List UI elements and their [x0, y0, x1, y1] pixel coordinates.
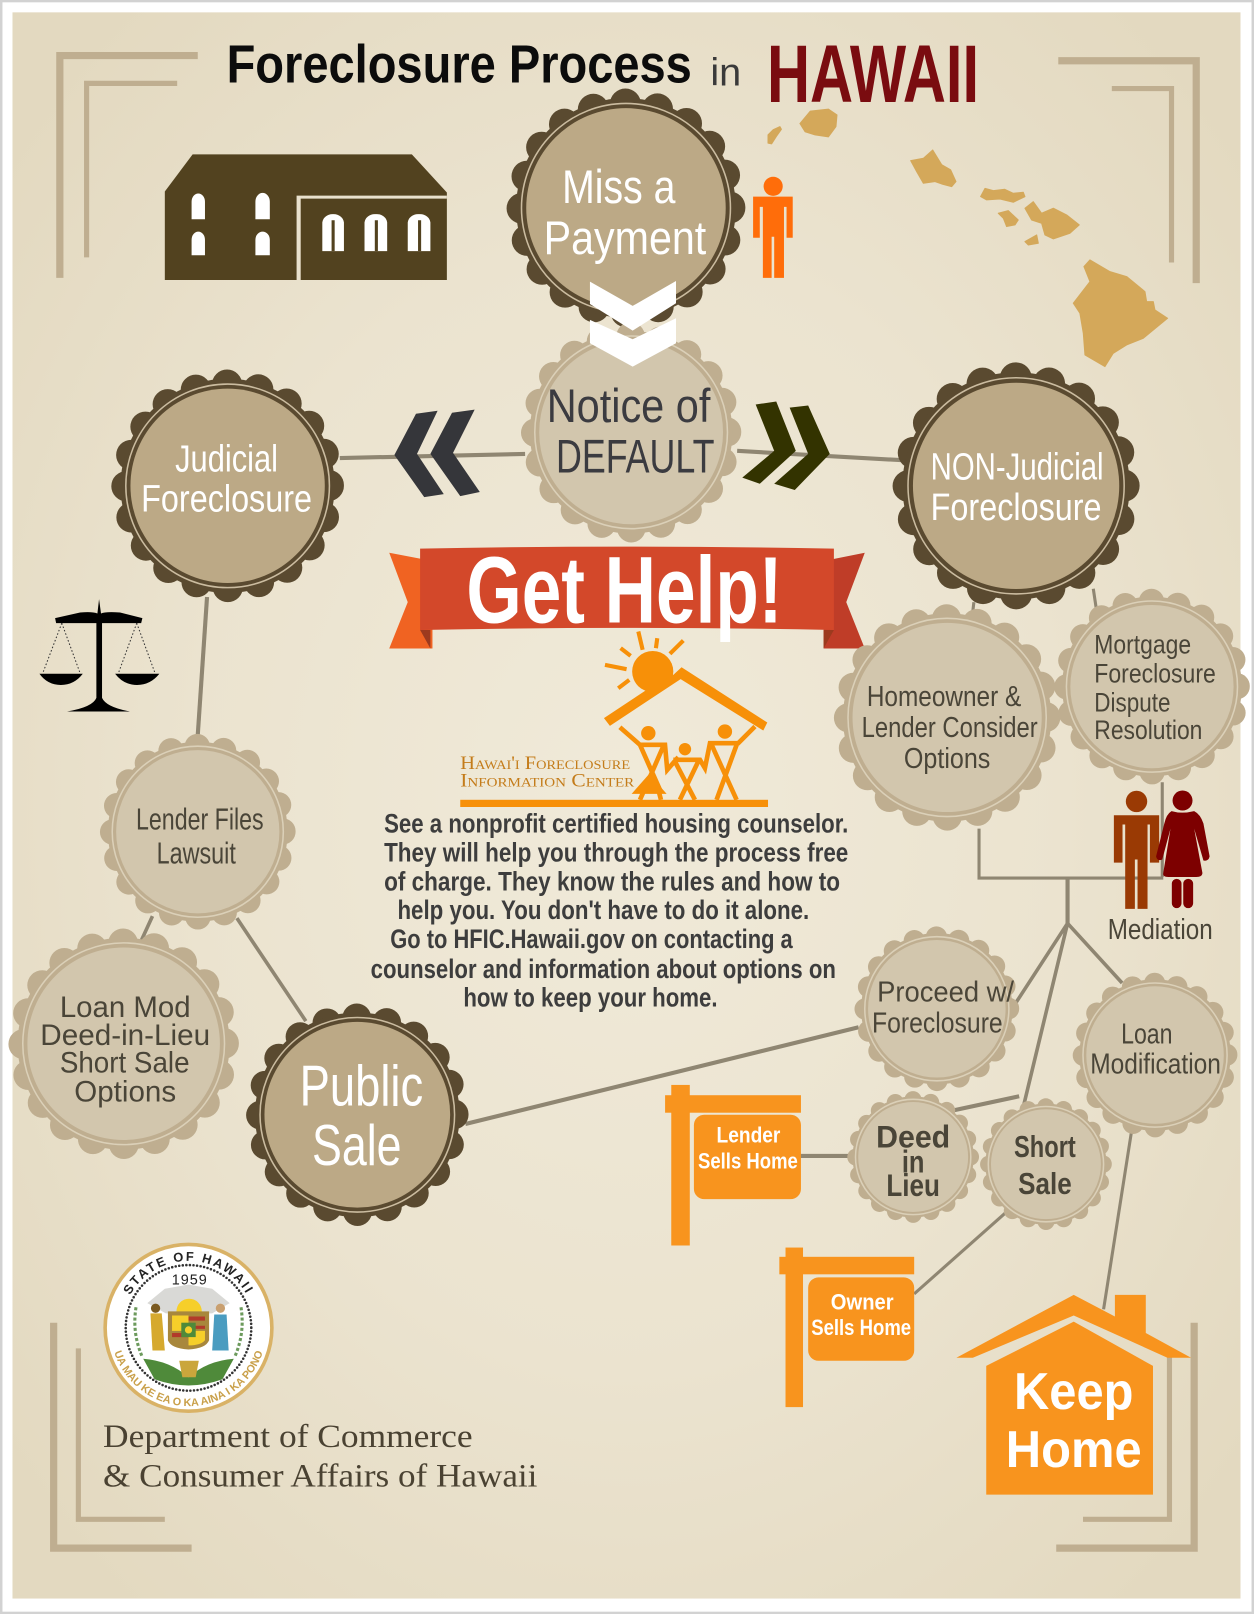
seal: State of Hawaii: 1959	[172, 1273, 207, 1289]
label: Mediation: Mediation	[1108, 914, 1213, 946]
badge: Homeowner and Lender Consider Options: Lender Consider	[862, 712, 1038, 744]
badge: Notice of Default	[530, 331, 732, 534]
icon: Keep Home house	[956, 1295, 1191, 1495]
connector lines	[141, 451, 1163, 1309]
title: HAWAII	[767, 29, 979, 120]
banner: Get Help: Get Help!	[466, 538, 782, 644]
badge: Loan Mod options: Options	[74, 1075, 176, 1108]
logo: Hawaii Foreclosure Information Center	[460, 631, 768, 807]
badge: Mortgage Foreclosure Dispute Resolution: Foreclosure	[1094, 658, 1216, 688]
sign: Lender Sells Home: Sells Home	[698, 1148, 798, 1173]
badge: Public Sale: Sale	[312, 1114, 402, 1178]
badge: Proceed with Foreclosure: Foreclosure	[872, 1007, 1003, 1039]
badge: Short Sale	[985, 1104, 1107, 1225]
badge: Homeowner and Lender Consider Options: Homeowner &	[867, 681, 1021, 713]
badge: Deed in Lieu: Deed	[876, 1119, 950, 1155]
icon: scales of justice	[39, 599, 159, 711]
title: Foreclosure Process	[227, 35, 692, 94]
badge: Notice of Default: Notice of	[547, 380, 711, 433]
arrow: down chevrons	[590, 281, 676, 367]
icon: Keep Home house: Keep	[1014, 1362, 1133, 1420]
logo text: Hawai'i Foreclosure	[460, 753, 630, 774]
badge: Judicial Foreclosure	[121, 379, 335, 593]
badge: Mortgage Foreclosure Dispute Resolution	[1062, 597, 1242, 777]
badge: Lender Files Lawsuit: Lawsuit	[157, 836, 236, 871]
badge: Proceed with Foreclosure: Proceed w/	[877, 977, 1014, 1009]
badge: Loan Modification: Loan	[1121, 1019, 1173, 1051]
badge: Miss a Payment	[516, 98, 736, 318]
icon: plantation building	[165, 154, 447, 280]
badge: Loan Mod options: Deed-in-Lieu	[40, 1019, 210, 1052]
seal: State of Hawaii: STATE OF HAWAII	[124, 1252, 253, 1294]
badge: Judicial Foreclosure: Foreclosure	[141, 479, 312, 521]
title	[227, 29, 979, 120]
text: Department of Commerce and Consumer Affairs: & Consumer Affairs of Hawaii	[103, 1458, 537, 1494]
text block: get help advice: help you. You don't have to do it alone.	[397, 895, 809, 925]
icon: woman	[1156, 791, 1210, 908]
arrow: left chevrons to judicial	[394, 410, 480, 497]
text block: get help advice: of charge. They know the rules and how to	[384, 866, 840, 896]
badge: Mortgage Foreclosure Dispute Resolution: Resolution	[1094, 715, 1202, 745]
emblem	[135, 1285, 242, 1385]
badge: Non-Judicial Foreclosure: NON-Judicial	[931, 447, 1104, 489]
badge: Deed in Lieu	[853, 1096, 974, 1218]
logo text	[460, 753, 635, 791]
sign: Lender Sells Home	[665, 1085, 801, 1245]
badge: Non-Judicial Foreclosure	[902, 372, 1130, 599]
icon: sun	[605, 631, 683, 692]
badge: Lender Files Lawsuit	[108, 742, 288, 922]
badge: Mortgage Foreclosure Dispute Resolution: Mortgage	[1094, 630, 1191, 660]
icon: house roof and family	[604, 667, 767, 800]
seal: State of Hawaii: UA MAU KE EA O KA AINA I KA PONO	[115, 1350, 262, 1406]
map: Hawaiian islands	[768, 109, 1168, 367]
badge: Short Sale: Sale	[1018, 1166, 1072, 1201]
badge: Homeowner and Lender Consider Options: Options	[904, 743, 990, 775]
text: Department of Commerce and Consumer Affairs: Department of Commerce	[103, 1419, 473, 1455]
icon: person	[753, 177, 793, 278]
icon: man	[1114, 791, 1159, 909]
text block: get help advice: Go to HFIC.Hawaii.gov on contacting a	[390, 924, 794, 954]
badge: Short Sale: Short	[1014, 1129, 1076, 1164]
text block: get help advice	[371, 809, 848, 1013]
icons: mediation couple	[1114, 791, 1210, 909]
text block: get help advice: They will help you through the process free	[384, 838, 848, 868]
badge: Non-Judicial Foreclosure: Foreclosure	[931, 487, 1102, 529]
badge: Loan Modification	[1079, 979, 1231, 1131]
badge: Loan Modification: Modification	[1090, 1049, 1221, 1081]
badge: Deed in Lieu: Lieu	[886, 1167, 940, 1203]
badge: Homeowner and Lender Consider Options	[843, 613, 1051, 822]
badge: Public Sale: Public	[300, 1055, 423, 1119]
sign: Lender Sells Home: Lender	[717, 1123, 781, 1148]
badge: Mortgage Foreclosure Dispute Resolution: Dispute	[1094, 687, 1170, 717]
badge: Miss a Payment: Miss a	[562, 161, 676, 214]
title: in	[710, 51, 741, 94]
badge: Judicial Foreclosure: Judicial	[175, 438, 278, 480]
text block: get help advice: See a nonprofit certified housing counselor.	[384, 809, 848, 839]
badge: Deed in Lieu: in	[902, 1143, 924, 1179]
badge: Public Sale	[255, 1012, 460, 1217]
sign: Owner Sells Home	[779, 1248, 914, 1407]
text: Department of Commerce and Consumer Affairs	[103, 1419, 537, 1494]
badge: Loan Mod options: Short Sale	[60, 1047, 190, 1080]
icon: Keep Home house: Home	[1006, 1420, 1142, 1478]
sign: Owner Sells Home: Owner	[831, 1289, 894, 1314]
badge: Loan Mod options	[18, 938, 230, 1150]
badge: Miss a Payment: Payment	[544, 212, 706, 265]
badge: Proceed with Foreclosure	[861, 933, 1014, 1085]
badge: Lender Files Lawsuit: Lender Files	[136, 802, 264, 837]
seal: State of Hawaii	[103, 1242, 274, 1413]
badge: Notice of Default: DEFAULT	[556, 430, 714, 483]
text block: get help advice: how to keep your home.	[463, 983, 718, 1013]
sign: Owner Sells Home: Sells Home	[811, 1315, 911, 1340]
arrow: right chevrons to non-judicial	[742, 401, 830, 490]
text block: get help advice: counselor and information about options on	[371, 954, 836, 984]
badge: Loan Mod options: Loan Mod	[60, 991, 191, 1024]
logo text: Information Center	[460, 770, 635, 791]
